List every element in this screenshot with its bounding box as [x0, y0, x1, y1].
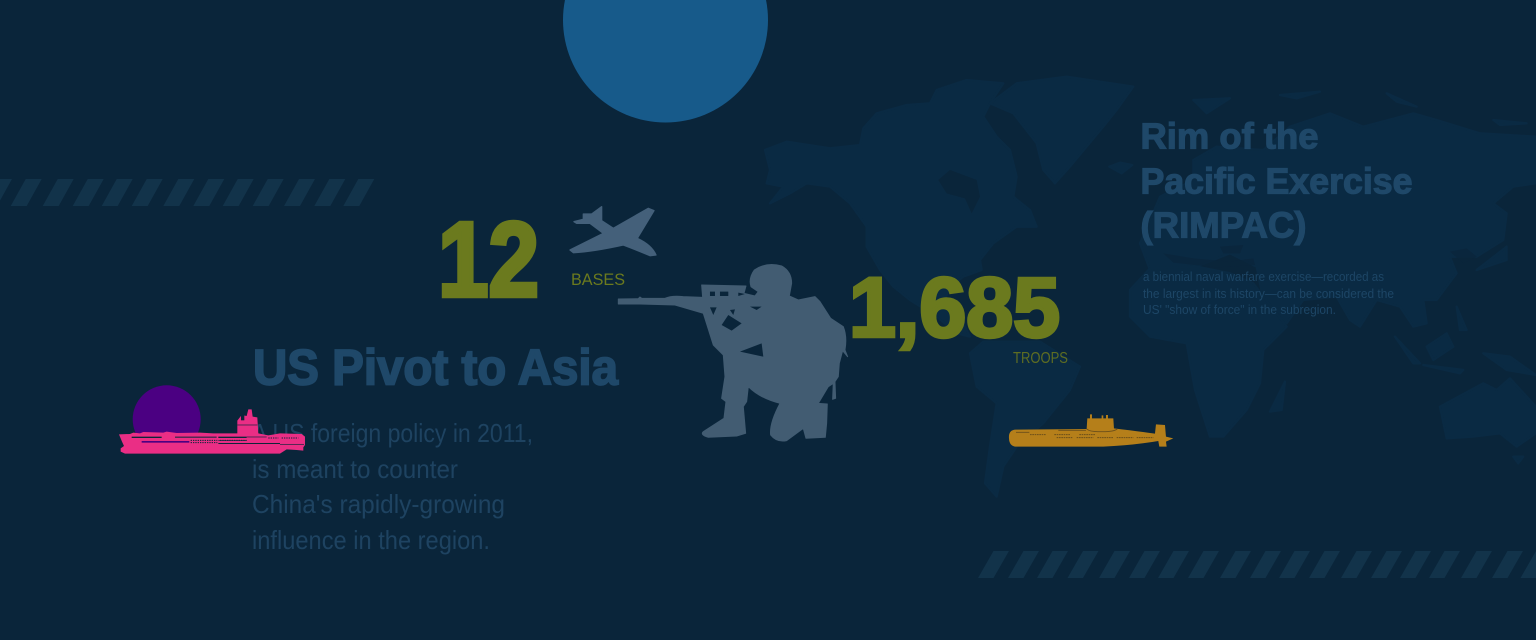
paragraph: A US foreign policy in 2011,	[252, 418, 533, 448]
paragraph: US' "show of force" in the subregion.	[1143, 302, 1336, 317]
stat: 1,685 troops	[849, 260, 1068, 367]
continent: Australia	[1440, 378, 1536, 463]
top circle	[563, 0, 768, 122]
icon: plane	[570, 207, 656, 256]
paragraph	[1143, 269, 1394, 317]
icon: submarine	[1009, 414, 1173, 447]
paragraph	[252, 418, 533, 555]
icon: soldier	[618, 265, 848, 441]
inland seas	[1163, 245, 1477, 267]
island: Iceland	[1109, 163, 1132, 173]
number 12: 12	[438, 201, 539, 319]
continent: South America	[970, 342, 1080, 497]
continent: Africa	[1130, 267, 1287, 437]
Hudson Bay	[938, 170, 980, 213]
paragraph: China's rapidly-growing	[252, 489, 505, 519]
text block: RIMPAC	[1140, 116, 1412, 317]
paragraph: the largest in its history—can be considered the	[1143, 286, 1394, 301]
continent: North America	[765, 80, 1037, 337]
number 1,685: 1,685	[849, 260, 1060, 354]
label troops: TROOPS	[1013, 350, 1068, 367]
continent: Eurasia	[1140, 113, 1536, 327]
heading: Rim of the	[1140, 116, 1318, 156]
world map	[765, 77, 1536, 497]
islands: Asia-Pacific	[1193, 92, 1536, 412]
paragraph: a biennial naval warfare exercise—recorded as	[1143, 269, 1384, 284]
icon: purple circle	[133, 385, 201, 453]
continent: Greenland	[990, 77, 1133, 183]
stat: 12 bases	[438, 201, 625, 319]
heading: Pacific Exercise	[1140, 160, 1412, 202]
heading	[1140, 116, 1412, 246]
label bases: BASES	[571, 270, 625, 289]
heading: US Pivot to Asia	[253, 340, 619, 396]
heading: (RIMPAC)	[1140, 204, 1306, 246]
paragraph: influence in the region.	[252, 525, 490, 555]
text block: US Pivot to Asia	[252, 340, 619, 555]
paragraph: is meant to counter	[252, 454, 458, 484]
icon: aircraft carrier	[119, 409, 305, 454]
